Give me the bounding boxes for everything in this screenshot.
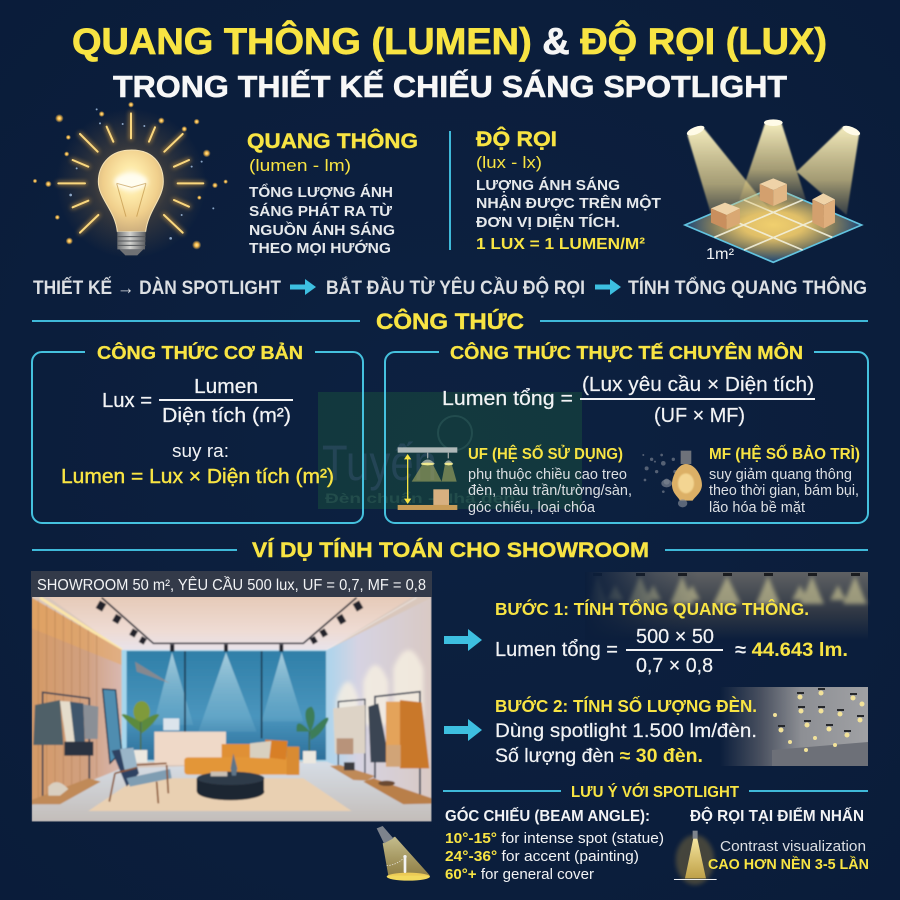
text block: quang thông: TỔNG LƯỢNG ÁNH xyxy=(249,183,393,201)
title: QUANG THÔNG (LUMEN) & ĐỘ RỌI (LUX) xyxy=(72,20,827,62)
icon: glowing light bulb xyxy=(33,102,228,258)
panel: professional formula: (UF × MF) xyxy=(654,405,745,427)
illustration: showroom interior xyxy=(32,572,432,822)
arrow: flow 1 xyxy=(290,279,316,295)
text block: quang thông: NGUỒN ÁNH SÁNG xyxy=(249,221,395,239)
text block: quang thông: (lumen - lm) xyxy=(249,156,351,175)
divider xyxy=(449,131,451,250)
panel: professional formula: đèn, màu trần/tường/sàn, xyxy=(468,483,632,499)
heading: công thức: CÔNG THỨC xyxy=(376,309,524,334)
title: TRONG THIẾT KẾ CHIẾU SÁNG SPOTLIGHT xyxy=(113,69,787,104)
panel: professional formula: góc chiếu, loại chóa xyxy=(468,500,596,516)
panel: professional formula: suy giảm quang thông xyxy=(709,467,852,483)
icon: accent contrast cone xyxy=(674,831,717,885)
step 2 calculation: BƯỚC 2: TÍNH SỐ LƯỢNG ĐÈN. xyxy=(495,695,757,716)
icon: UF room section xyxy=(398,447,457,510)
text block: quang thông: QUANG THÔNG xyxy=(247,129,418,153)
icon: MF dusty bulb xyxy=(642,451,702,507)
watermark: green block: Đèn chuẩn - Nhà đẹp xyxy=(325,490,515,506)
step 1 calculation: 500 × 50 xyxy=(636,626,714,648)
step 2 calculation: Dùng spotlight 1.500 lm/đèn. xyxy=(495,721,757,742)
text block: beam angle xyxy=(445,807,664,883)
title xyxy=(72,20,827,104)
panel: professional formula: theo thời gian, bám bụi, xyxy=(709,483,859,499)
text block: độ rọi: LƯỢNG ÁNH SÁNG xyxy=(476,177,620,194)
icon: three spotlights on 1m2 floor grid xyxy=(685,119,862,262)
panel: basic formula: CÔNG THỨC CƠ BẢN xyxy=(97,342,303,363)
text block: beam angle: GÓC CHIẾU (BEAM ANGLE): xyxy=(445,807,650,825)
step 1 calculation: BƯỚC 1: TÍNH TỔNG QUANG THÔNG. xyxy=(495,598,809,619)
flow line: design process: BẮT ĐẦU TỪ YÊU CẦU ĐỘ RỌI xyxy=(326,277,585,299)
step 1 calculation: Lumen tổng = xyxy=(495,639,618,661)
step 1 calculation xyxy=(495,598,848,677)
text block: độ rọi: ĐƠN VỊ DIỆN TÍCH. xyxy=(476,213,620,231)
panel: professional formula: phụ thuộc chiều cao treo xyxy=(468,467,627,483)
panel: professional formula: UF (HỆ SỐ SỬ DỤNG) xyxy=(468,445,623,463)
caption bar: showroom data: SHOWROOM 50 m², YÊU CẦU 500 lux, UF = 0,7, MF = 0,8 xyxy=(37,577,426,594)
text block: accent illuminance: Contrast visualization xyxy=(720,839,866,855)
text block: độ rọi: (lux - lx) xyxy=(476,153,542,172)
arrow: step 2 xyxy=(444,719,482,741)
flow line: design process xyxy=(33,277,867,299)
label: 1m²: 1m² xyxy=(706,246,734,263)
arrow: step 1 xyxy=(444,629,482,651)
panel: basic formula: Lux = xyxy=(102,390,152,412)
panel: basic formula: Lumen = Lux × Diện tích (m²) xyxy=(61,466,334,488)
text block: beam angle: 10°-15° for intense spot (statue) xyxy=(445,831,664,847)
panel: basic formula: Lumen xyxy=(194,376,258,398)
step 2 calculation: Số lượng đèn ≈ 30 đèn. xyxy=(495,746,703,767)
panel: professional formula: lão hóa bề mặt xyxy=(709,500,805,516)
text block: độ rọi: ĐỘ RỌI xyxy=(476,127,557,151)
arrow: flow 2 xyxy=(595,279,621,295)
watermark: green block: Tuyến xyxy=(322,435,437,491)
panel: professional formula xyxy=(385,342,868,523)
icon: beam angle spotlight xyxy=(377,826,430,881)
text block: quang thông: THEO MỌI HƯỚNG xyxy=(249,239,391,257)
panel: basic formula: suy ra: xyxy=(172,441,229,461)
step 1 calculation: ≈ 44.643 lm. xyxy=(735,640,848,661)
text block: accent illuminance: ĐỘ RỌI TẠI ĐIỂM NHẤN xyxy=(690,807,864,825)
text block: quang thông xyxy=(247,129,418,257)
text block: beam angle: 24°-36° for accent (painting) xyxy=(445,849,639,865)
photo: ceiling lights row xyxy=(585,572,868,640)
heading: showroom example: VÍ DỤ TÍNH TOÁN CHO SHOWROOM xyxy=(252,539,649,562)
panel: professional formula: CÔNG THỨC THỰC TẾ CHUYÊN MÔN xyxy=(450,342,803,363)
panel: basic formula xyxy=(32,342,363,523)
text block: accent illuminance: CAO HƠN NỀN 3-5 LẦN xyxy=(708,856,869,873)
text block: độ rọi: 1 LUX = 1 LUMEN/M² xyxy=(476,236,645,253)
watermark: green block xyxy=(318,392,582,509)
text block: quang thông: SÁNG PHÁT RA TỪ xyxy=(249,202,393,220)
text block: độ rọi: NHẬN ĐƯỢC TRÊN MỘT xyxy=(476,194,661,212)
flow line: design process: TÍNH TỔNG QUANG THÔNG xyxy=(628,277,867,299)
flow line: design process: THIẾT KẾ → DÀN SPOTLIGHT xyxy=(33,277,281,299)
step 2 calculation xyxy=(495,695,757,767)
photo: ceiling lights grid xyxy=(720,687,868,766)
text block: độ rọi xyxy=(476,127,661,253)
step 1 calculation: 0,7 × 0,8 xyxy=(636,655,713,677)
text block: beam angle: 60°+ for general cover xyxy=(445,867,594,883)
panel: professional formula: (Lux yêu cầu × Diện tích) xyxy=(582,374,814,396)
panel: professional formula: Lumen tổng = xyxy=(442,388,573,410)
caption bar: showroom data xyxy=(31,571,432,597)
text block: accent illuminance xyxy=(690,807,869,873)
heading: spotlight notes: LƯU Ý VỚI SPOTLIGHT xyxy=(571,782,739,801)
panel: basic formula: Diện tích (m²) xyxy=(162,405,291,427)
panel: professional formula: MF (HỆ SỐ BẢO TRÌ) xyxy=(709,445,860,463)
